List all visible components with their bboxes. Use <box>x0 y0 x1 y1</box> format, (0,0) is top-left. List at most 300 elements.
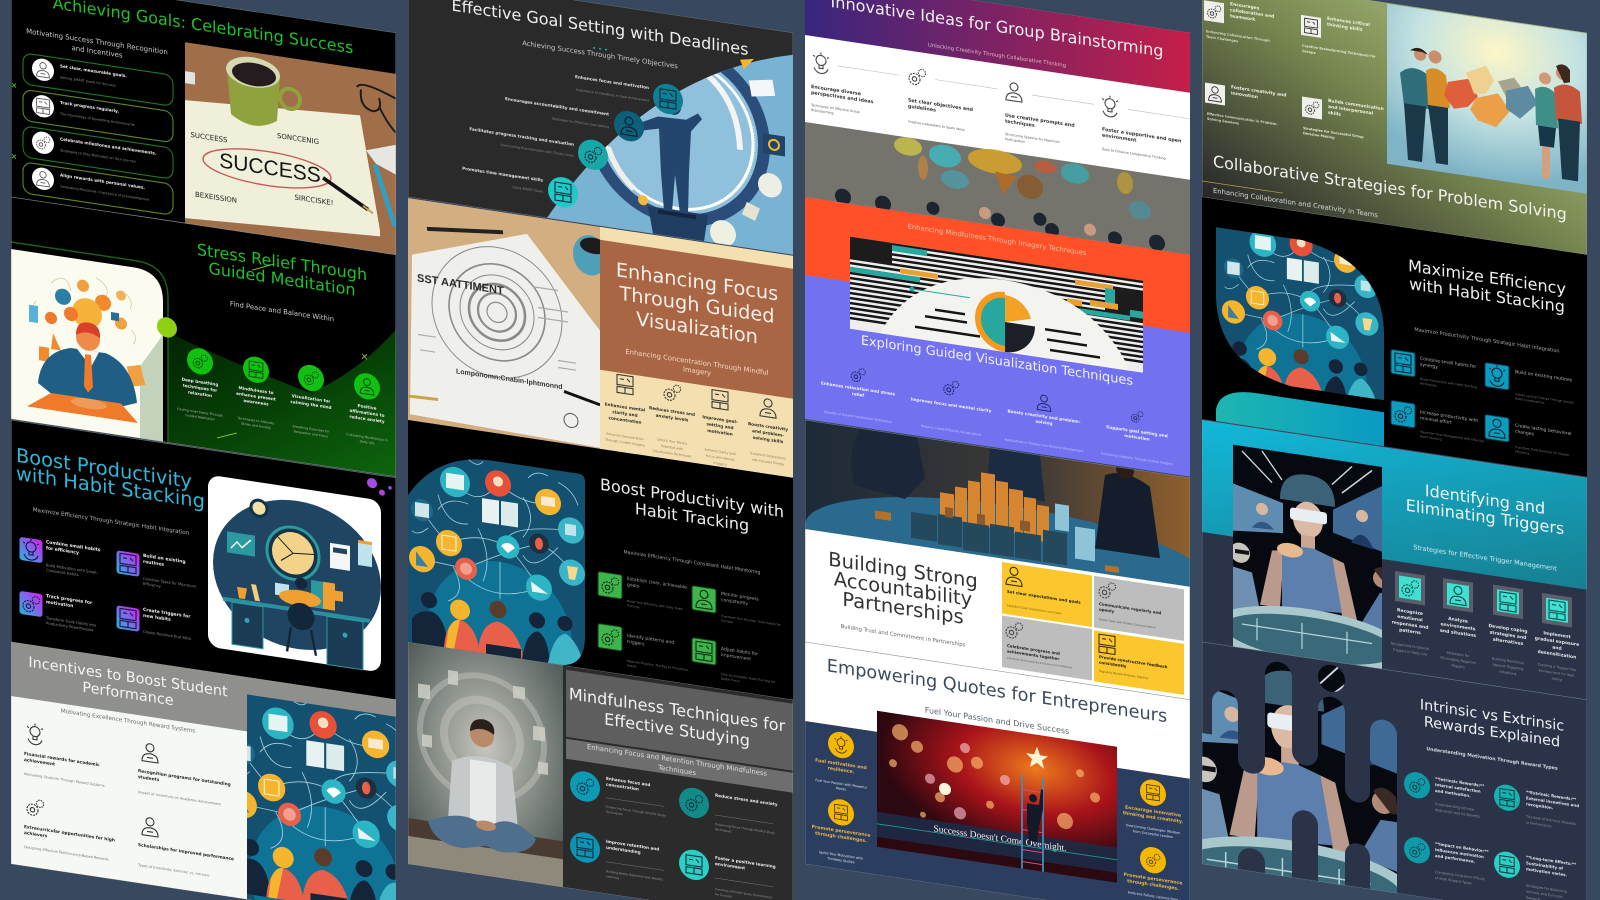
item: deep breathing: Guided Meditation <box>185 413 215 422</box>
item: reduces stress <box>649 381 695 459</box>
subtitle: Unlocking Creativity Through Collaborative Thinking <box>928 42 1066 69</box>
item: intrinsic: Understanding Intrinsic <box>1435 802 1475 812</box>
panel: Innovative Ideas for Group Brainstorming <box>805 0 1190 258</box>
item: creativity: innovation <box>1231 90 1258 100</box>
item: supportive environment: Foster a supportive and open <box>1102 127 1182 145</box>
item: creativity: Transform Distractions <box>749 451 786 461</box>
item: combine habits: Combine small habits <box>46 539 101 553</box>
item: critical thinking: Enhances critical <box>1327 16 1370 28</box>
item: positive environment: environment <box>715 861 745 871</box>
item: track progress: Track progress for <box>46 593 93 606</box>
card: align rewards: Align rewards with personal values. <box>60 172 145 190</box>
goal list: Encourages accountability and commitment <box>505 96 609 117</box>
item: long-term: Strategies for Balancing <box>1526 884 1567 894</box>
white header area <box>805 642 1190 779</box>
goal list: Promotes time management skills <box>462 166 543 183</box>
item: patterns <box>598 624 688 676</box>
item: recognize: emotional <box>1397 614 1423 624</box>
item: extracurricular: Designing Effective Performance-Based Rewards <box>24 845 109 862</box>
subtitle: Achieving Success Through Timely Objectives <box>522 39 678 71</box>
item: communication: Strategies for Successful Group <box>1303 126 1364 139</box>
item: patterns: Measure Progress: The Key to Productive <box>627 659 688 672</box>
item: goal setting: Improves goal- <box>702 414 738 424</box>
lime dot <box>157 317 177 338</box>
item: track progress <box>20 589 97 633</box>
item: mindfulness <box>236 354 276 431</box>
item: long-term <box>1494 850 1577 900</box>
item: goal setting <box>702 388 738 468</box>
item: build on routines: Combine Tasks for Maximum <box>143 577 197 589</box>
item: financial rewards: Financial rewards for academic <box>24 751 100 768</box>
item: visualization: Breathing Exercises for <box>293 424 330 434</box>
item: exposure: being <box>1552 677 1562 682</box>
item: affirmations: affirmations to <box>350 408 385 418</box>
item: build on routines <box>116 550 196 588</box>
item: extrinsic: in Performance <box>1526 821 1552 828</box>
item: analyze: environments <box>1441 621 1476 633</box>
item: creativity <box>1205 80 1286 133</box>
subtitle: Maximize Efficiency Through Strategic Habit Integration <box>33 507 190 537</box>
item: patterns: triggers <box>627 639 645 648</box>
item: build routines: Habit Combinations <box>1515 396 1545 405</box>
item: reduces stress: Reduces stress and <box>649 405 695 417</box>
photo: success notebook on desk: SIRCCISKE! <box>294 193 333 207</box>
item: behavior <box>1404 835 1490 888</box>
item: clear objectives: guidelines <box>908 103 936 114</box>
item: improve retention: Learning <box>606 874 619 880</box>
item: enhance focus: Enhancing Focus Through Mindful Study <box>606 805 666 818</box>
photo: success notebook on desk: SUCCEESS <box>191 130 228 145</box>
panel: Maximize Efficiency with Habit Stacking <box>1168 153 1587 485</box>
item: creativity: solving <box>1036 419 1052 426</box>
item: build routines <box>1485 362 1574 409</box>
item: recognition: Recognition programs for outstanding <box>138 768 231 788</box>
item: monitor progress: Monitor progress <box>721 591 760 603</box>
item: relaxation <box>821 363 896 425</box>
item: communication: Builds communication <box>1328 98 1384 112</box>
item: goal setting: Focus with Mental <box>706 454 734 462</box>
subtitle: Maximize Efficiency Through Consistent Habit Monitoring <box>624 549 760 576</box>
item: diverse perspectives: Brainstorming <box>811 108 833 115</box>
tile: celebrate <box>1002 616 1092 681</box>
item: promote perseverance right: Promote perseverance <box>1124 872 1182 887</box>
item: encourage innovative: thinking and creativity. <box>1123 810 1183 825</box>
item: adjust habits: improvement <box>721 652 751 662</box>
title: Incentives to Boost Student <box>28 655 228 701</box>
item: mental clarity: Enhances mental <box>605 402 646 413</box>
subtitle: Motivating Success Through Recognition <box>26 26 168 57</box>
tile: celebrate: Celebrate Achievements and Learn from Setbacks <box>1007 656 1073 670</box>
card: set clear goals: Set clear, measurable goals. <box>60 63 127 78</box>
item: reduce stress: Reduce stress and anxiety <box>715 793 778 807</box>
item: exposure: and <box>1552 645 1562 652</box>
photo: goal sketch paper <box>408 208 608 449</box>
item: creativity: Boosts creativity and problem- <box>1007 408 1081 424</box>
item: improve retention <box>570 830 664 887</box>
tile: communicate: Communicate regularly and <box>1099 601 1161 615</box>
item: create triggers: Create Routines that Stick <box>143 630 192 641</box>
item: analyze: Strategies for <box>1446 651 1470 658</box>
frame line <box>11 242 168 443</box>
item: combine habits: Techniques <box>1419 381 1437 388</box>
item: goal setting: Supports goal setting and <box>1106 424 1168 438</box>
item: financial rewards <box>24 722 105 788</box>
item: lasting change: Efficiency <box>1515 449 1530 456</box>
panel: Enhancing Focus Through Guided Visualization <box>408 198 793 478</box>
subtitle: Enhancing Mindfulness Through Imagery Techniques <box>908 222 1087 257</box>
photo: success notebook on desk: SUCCESS <box>219 149 321 187</box>
item: encourage innovative <box>1123 775 1183 841</box>
item: deep breathing: Finding Inner Peace Through <box>177 407 223 418</box>
panel: Effective Goal Setting <box>408 0 793 257</box>
item: promote perseverance left: through challenges. <box>815 831 867 844</box>
item: mental clarity: Improves focus and mental clarity <box>911 396 992 413</box>
tile: feedback <box>1094 630 1184 695</box>
title: Stress Relief Through <box>197 240 367 284</box>
item: extrinsic: **Extrinsic Rewards:** <box>1526 789 1577 802</box>
title: Guided Meditation <box>208 259 356 300</box>
item: diverse perspectives: perspectives and ideas <box>811 90 873 105</box>
item: mindfulness: Techniques to Alleviate <box>237 416 274 426</box>
item: recognition: Impact of Incentives on Academic Achievement <box>138 790 222 807</box>
item: track progress: motivation <box>46 599 73 609</box>
subtitle: Find Peace and Balance Within <box>230 300 334 323</box>
item: track progress: Productivity Powerhouses <box>46 621 93 632</box>
header band <box>11 642 396 732</box>
item: coping: alternatives <box>1493 637 1524 647</box>
item: reduce stress: Enhancing Focus Through Mindful Study <box>715 822 775 835</box>
tile: celebrate: Celebrate progress and <box>1007 643 1060 656</box>
item: long-term: Intrinsic and Extrinsic <box>1526 890 1563 899</box>
item: clear objectives: Set clear objectives and <box>908 97 973 113</box>
item: long-term: Sustainability of <box>1526 860 1563 871</box>
item: mindfulness: Mindfulness to <box>238 385 274 395</box>
item: goal setting <box>1101 406 1173 466</box>
item: behavior: of Both Reward Types <box>1435 876 1472 885</box>
tile: celebrate: achievements together <box>1007 649 1059 661</box>
card: set clear goals <box>23 53 173 106</box>
goal list: Strategies for Effective Goal Setting <box>552 117 609 129</box>
illustration: clock and desk <box>208 475 381 672</box>
subtitle: Techniques <box>657 763 696 777</box>
item: fuel motivation <box>815 728 867 795</box>
brown title block <box>600 240 793 399</box>
chart image: stripes and pie <box>850 237 1143 373</box>
orbit details <box>710 52 785 256</box>
item: build routines: Build on existing routines <box>1515 369 1573 384</box>
illustration: learning network <box>247 694 396 900</box>
item: financial rewards: Motivating Students Through Reward Systems <box>24 772 105 788</box>
item: behavior: Influences motivation <box>1435 847 1484 859</box>
photo: success notebook on desk: BEXEISSION <box>195 190 237 205</box>
item: positive environment: Foster a positive learning <box>715 855 776 869</box>
subtitle: Enhancing Collaboration and Creativity in Teams <box>1213 187 1378 219</box>
orange band <box>805 197 1190 333</box>
panel: Identifying and Eliminating Triggers <box>1202 420 1587 718</box>
goal node icons <box>548 66 683 225</box>
item: creative prompts: techniques <box>1005 119 1035 129</box>
item: affirmations: Positive <box>358 403 377 411</box>
item: long-term: motivation varies. <box>1526 866 1567 878</box>
item: affirmations: Cultivating Mindfulness in <box>346 432 388 442</box>
item: intrinsic: and motivation. <box>1435 788 1471 798</box>
item: behavior: Comparing Long-term Effects <box>1435 870 1485 881</box>
item: extrinsic: The Role of Extrinsic Rewards <box>1525 814 1576 826</box>
item: visualization: Visualization for <box>292 393 331 404</box>
item: create triggers: new habits <box>143 613 171 623</box>
title: Empowering Quotes for Entrepreneurs <box>827 655 1167 727</box>
item: promote perseverance left: Ignite Your Motivation with <box>819 850 863 861</box>
photo: bokeh and ladder: Successs Doesn't Come Overnight. <box>933 823 1067 854</box>
item: behavior: and performance. <box>1435 853 1476 864</box>
item: enhance focus: Enhance focus and <box>606 776 650 787</box>
item: improve retention: Improve retention and <box>606 839 659 852</box>
illustration: learning network <box>348 381 668 731</box>
item: reduces stress: anxiety levels <box>656 413 689 423</box>
item: coping: Against Triggering <box>1493 663 1523 671</box>
item: coping: Develop coping <box>1488 623 1528 635</box>
green wave <box>168 330 396 476</box>
item: patterns: Habits <box>627 663 637 669</box>
title: Accountability <box>834 567 973 611</box>
item: extracurricular <box>24 798 115 863</box>
item: mental clarity: Enhance Concentration <box>606 432 644 441</box>
item: scholarships: Scholarships for improved performance <box>138 842 234 862</box>
item: promote perseverance left <box>812 795 870 867</box>
item: mental clarity: Steps to Create Effective Visualizations <box>921 424 982 437</box>
photo: success notebook on desk: SONCCENIG <box>277 131 319 146</box>
item: coping: Situations <box>1500 670 1517 676</box>
item: increase productivity: Maximize Time Management with Effective <box>1420 430 1484 443</box>
photo: success notebook on desk <box>185 42 396 255</box>
subtitle: Strategies for Effective Trigger Management <box>1413 543 1557 573</box>
item: creativity: Fosters creativity and <box>1231 84 1286 99</box>
goal list <box>462 57 650 210</box>
item: diverse perspectives <box>810 51 900 125</box>
item: creativity <box>1004 389 1084 453</box>
card: track progress <box>23 89 173 143</box>
item: reduces stress: Potential with <box>661 444 683 451</box>
item: creative prompts: Participation <box>1005 137 1025 144</box>
item: clear goals: Boost Your Efficiency with Daily Habit <box>627 599 684 611</box>
item: visualization <box>290 362 332 439</box>
item: creativity: solving skills <box>753 435 784 444</box>
item: mental clarity: concentration <box>609 415 641 425</box>
item: adjust habits <box>692 638 776 689</box>
item: supportive environment: Tools to Enhance Collaborative Thinking <box>1101 147 1166 161</box>
item: promote perseverance right <box>1124 843 1182 900</box>
item: creativity <box>748 396 788 467</box>
item: enhance focus: concentration <box>606 782 639 792</box>
subtitle: Maximize Productivity Through Strategic Habit Integration <box>1414 327 1560 355</box>
card: celebrate milestones <box>23 126 173 179</box>
panel: Stress Relief <box>11 197 396 477</box>
item: financial rewards: achievement <box>24 757 55 768</box>
item: patterns: Identify patterns and <box>627 633 674 646</box>
goal list: Importance of Deadlines in Goal Achievement <box>576 88 650 103</box>
item: recognize: Recognizing Emotional <box>1391 641 1429 651</box>
item: visualization: Relaxation and Focus <box>294 429 328 439</box>
item: exposure: gradual exposure <box>1535 635 1579 648</box>
item: lasting change: changes <box>1515 429 1535 438</box>
item: combine habits: for efficiency <box>46 545 79 556</box>
item: affirmations <box>346 370 388 447</box>
subtitle: and Incentives <box>71 43 123 60</box>
item: monitor progress: Transform Your Routine: Track Habits for <box>720 614 782 627</box>
item: reduce stress: Techniques <box>714 827 732 834</box>
title: with Habit Stacking <box>16 462 205 513</box>
title: Maximize Efficiency <box>1408 256 1566 299</box>
item: collaboration <box>1204 0 1274 49</box>
item: scholarships: Types of Incentives: Extrinsic vs. Intrinsic <box>137 863 210 878</box>
item: recognize <box>1391 570 1429 657</box>
item: build on routines: Efficiency <box>143 582 162 589</box>
title: Performance <box>82 680 174 709</box>
item: combine habits <box>20 537 100 576</box>
item: exposure: Environment for Well- <box>1539 669 1576 678</box>
item: increase productivity: minimal effort <box>1420 415 1452 426</box>
title: Boost Productivity with <box>600 475 784 521</box>
item: analyze <box>1440 578 1476 671</box>
item: goal setting: Achieve Clarity and <box>705 447 735 456</box>
subtitle: Motivating Excellence Through Reward Systems <box>61 708 195 735</box>
item: creativity: Boosts creativity <box>748 421 788 432</box>
photo: woman with holographic screens <box>1210 421 1412 692</box>
accent line <box>1202 181 1283 193</box>
illustration: learning network <box>1168 153 1452 465</box>
item: deep breathing: relaxation <box>188 390 212 398</box>
item: lasting change: Create lasting behavioral <box>1515 423 1572 437</box>
item: enhance focus: Techniques <box>605 810 623 816</box>
item: creativity: into Focused Energy <box>752 458 784 466</box>
item: communication: Decision-Making <box>1303 131 1335 140</box>
man figure <box>638 94 702 220</box>
tile: communicate: openly <box>1099 607 1115 614</box>
item: track progress: Transform Daily Habits into <box>45 616 97 628</box>
tile: expectations: Establish Clear Expectations and Goals <box>1007 603 1062 616</box>
item: collaboration: collaboration and <box>1230 7 1274 20</box>
item: relaxation: relief <box>852 391 864 398</box>
item: communication: and interpersonal <box>1328 104 1374 117</box>
item: create triggers: Create triggers for <box>143 607 191 620</box>
item: extrinsic <box>1494 783 1579 833</box>
item: collaboration: Enhancing Collaboration Through <box>1206 29 1270 43</box>
item: monitor progress <box>692 586 782 632</box>
item: mindfulness: Stress and Anxiety <box>241 422 271 430</box>
tile: expectations: Set clear expectations and goals <box>1007 589 1081 605</box>
subtitle: Enhancing Concentration Through Mindful <box>625 348 769 377</box>
item: scholarships <box>137 816 234 881</box>
card: track progress: The Psychology of Rewarding Achievements <box>59 112 135 127</box>
teal shape <box>1216 387 1384 446</box>
item: creativity: Applications in Therapy and Personal Development <box>1004 437 1084 453</box>
item: build on routines: routines <box>143 559 164 568</box>
item: diverse perspectives: Encourage diverse <box>811 84 862 98</box>
subtitle: Enhancing Focus and Retention Through Mindfulness <box>587 743 767 778</box>
item: goal setting: Imagery <box>713 461 727 467</box>
item: positive environment: for Success <box>715 892 732 899</box>
item: monitor progress: Success <box>721 618 733 624</box>
title: Intrinsic vs Extrinsic <box>1420 697 1564 735</box>
item: promote perseverance right: through challenges. <box>1127 878 1179 892</box>
item: goal setting: motivation <box>707 428 733 437</box>
item: supportive environment: environment <box>1102 133 1137 144</box>
item: communication: skills <box>1328 110 1341 118</box>
decorative dots <box>594 48 606 50</box>
item: affirmations: reduce anxiety <box>349 414 385 424</box>
item: fuel motivation: Fuel Your Passion with Powerful <box>815 778 867 790</box>
title: Building Strong <box>828 548 978 593</box>
title: Collaborative Strategies for Problem Solving <box>1213 152 1567 224</box>
item: exposure: Creating a Trigger-Free <box>1538 662 1576 672</box>
item: analyze: Analyze <box>1448 616 1468 625</box>
panel: Exploring Guided Visualization Techniques <box>805 197 1190 477</box>
item: lasting change <box>1485 414 1572 462</box>
panel: Achieving Goals <box>11 0 396 255</box>
title: Rewards Explained <box>1424 714 1560 751</box>
subtitle: Imagery <box>683 365 711 377</box>
item: mental clarity: Through Guided Imagery <box>604 437 645 448</box>
title band <box>566 670 793 771</box>
item: build on routines: Build on existing <box>143 553 186 565</box>
panel: Boost Productivity with Habit Stacking <box>11 420 396 700</box>
item: creative prompts: Use creative prompts and <box>1005 113 1075 129</box>
tile: communicate <box>1094 576 1184 641</box>
title: Identifying and <box>1425 481 1545 518</box>
item: improve retention: understanding <box>606 845 641 855</box>
item: enhance focus <box>570 769 666 823</box>
item: exposure: desensitization <box>1538 649 1576 661</box>
title: Partnerships <box>842 588 964 629</box>
card: celebrate milestones: Strategies to Stay Motivated on Your Journey <box>60 148 136 164</box>
item: increase productivity: Increase productivity with <box>1420 409 1478 424</box>
item: adjust habits: Better Focus <box>721 676 740 683</box>
item: relaxation: Benefits of Guided Visualization Techniques <box>824 410 892 424</box>
illustration: stressed man <box>11 249 163 442</box>
item: recognize: patterns <box>1399 627 1421 636</box>
item: fuel motivation: resilience. <box>828 765 855 775</box>
item: supportive environment <box>1101 94 1190 164</box>
blue wedge <box>547 18 793 255</box>
panel: Incentives to Boost Student Performance <box>11 642 396 900</box>
item: coping: Building Resilience <box>1492 657 1524 665</box>
item: mental clarity: clarity and <box>612 409 638 418</box>
item: mental clarity <box>911 375 992 438</box>
cream panel <box>600 227 793 478</box>
item: clear goals: Tracking <box>626 603 640 609</box>
panel: Building Strong Accountability Partnerships <box>805 413 1215 704</box>
card: track progress: Track progress regularly. <box>60 100 119 114</box>
item: intrinsic: Internal satisfaction <box>1435 782 1481 794</box>
title: Effective Studying <box>604 710 750 750</box>
tile: feedback: Regularly Review Progress Together <box>1099 669 1149 680</box>
photo: goal sketch paper: Lomponomn:Cnabin-lphtmonnd <box>456 368 563 391</box>
title: Enhancing Focus <box>616 258 778 305</box>
item: positive environment <box>679 848 776 900</box>
item: reduce stress <box>679 786 778 840</box>
card: align rewards: Celebrating Milestones: Importance of Acknowledgment <box>60 184 150 202</box>
item: mindfulness: enhance present <box>236 391 276 402</box>
card: set clear goals: Setting SMART Goals for Success <box>60 75 116 88</box>
item: creative prompts <box>1005 82 1094 154</box>
item: communication <box>1302 94 1384 147</box>
tile: feedback: consistently <box>1099 660 1127 669</box>
goal list: Enhances focus and motivation <box>575 74 649 90</box>
item: monitor progress: consistently <box>721 597 748 607</box>
item: clear goals: goals <box>627 582 640 590</box>
item: critical thinking: thinking skills <box>1327 22 1363 33</box>
card: celebrate milestones: Celebrate milestones and achievements. <box>60 136 157 156</box>
